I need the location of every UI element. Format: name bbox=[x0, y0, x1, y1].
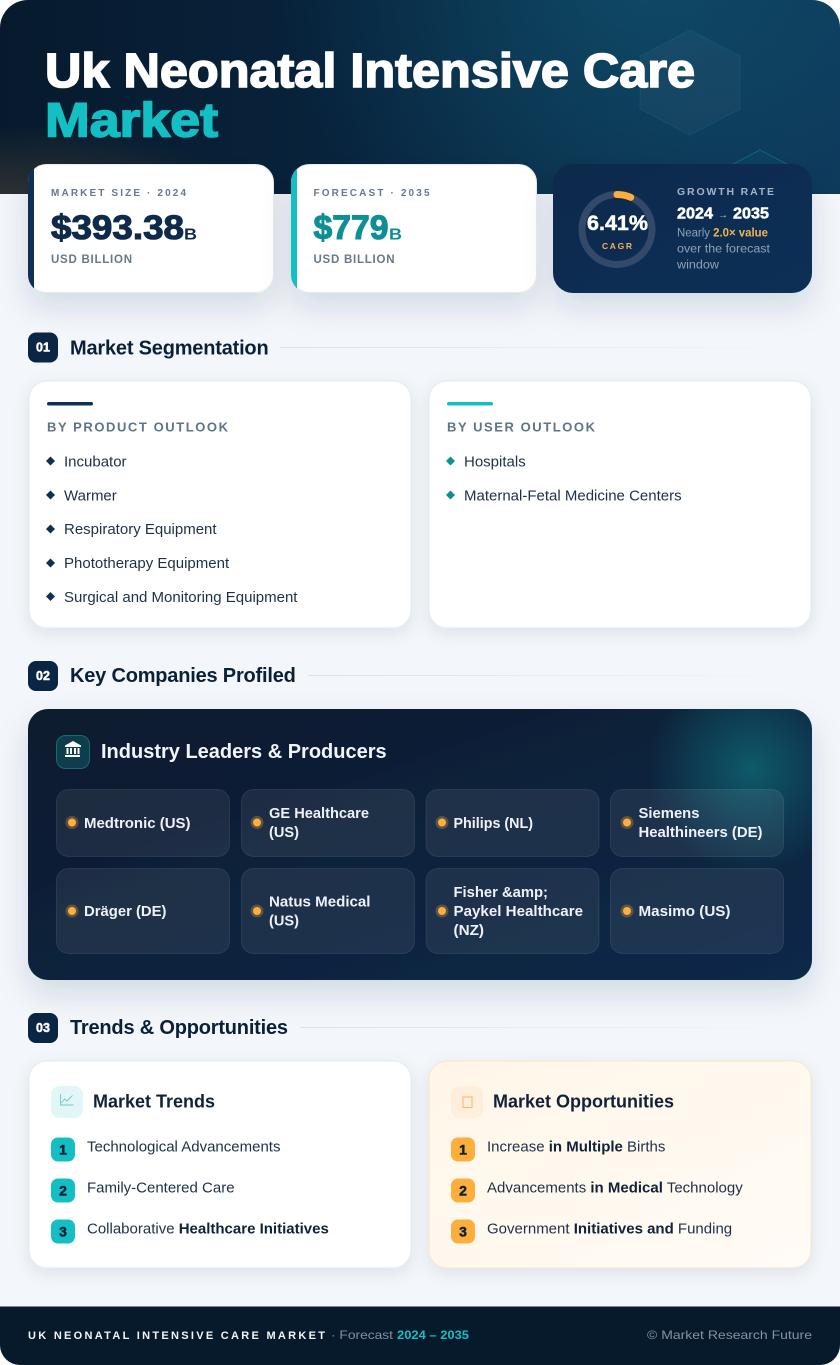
footer: · Forecast bbox=[331, 1328, 394, 1342]
company: Siemens Healthineers: Siemens bbox=[638, 806, 700, 822]
company: Fisher and Paykel Healthcare bbox=[426, 868, 599, 954]
stat card: growth rate: 2024 bbox=[677, 206, 713, 222]
stat card: forecast 2035: USD BILLION bbox=[314, 254, 394, 266]
header banner bbox=[0, 0, 840, 194]
section heading 01: 01 bbox=[36, 340, 50, 354]
company: GE Healthcare: (US) bbox=[269, 825, 299, 841]
panel: market trends: 2 bbox=[59, 1182, 67, 1198]
title: Market bbox=[45, 94, 218, 148]
panel: market opportunities: 2 bbox=[459, 1182, 467, 1198]
panel: by product outlook: Surgical and Monitoring Equipment bbox=[64, 589, 298, 606]
company: Medtronic bbox=[56, 790, 230, 856]
icon: placeholder glyph bbox=[451, 1086, 483, 1118]
company: Medtronic: Medtronic (US) bbox=[84, 816, 191, 832]
title bbox=[45, 45, 695, 148]
panel: market trends: Market Trends bbox=[93, 1092, 215, 1112]
stat card: market size 2024 bbox=[28, 164, 274, 293]
company: Fisher and Paykel Healthcare: (NZ) bbox=[454, 923, 484, 939]
panel: by product outlook: Incubator bbox=[64, 454, 127, 470]
company: Drager bbox=[56, 868, 230, 954]
panel: by product outlook: Respiratory Equipment bbox=[64, 521, 217, 538]
section heading 03: 03 bbox=[36, 1021, 50, 1035]
stat card: growth rate: 2035 bbox=[733, 206, 769, 222]
panel: by product outlook: BY PRODUCT OUTLOOK bbox=[47, 420, 229, 434]
company: Drager: Dräger (DE) bbox=[84, 904, 167, 920]
stat card: forecast 2035: B bbox=[389, 226, 402, 244]
panel: market opportunities bbox=[429, 1061, 811, 1268]
company: Siemens Healthineers bbox=[610, 790, 784, 856]
footer: 2024 – 2035 bbox=[397, 1328, 469, 1342]
panel: market trends: Family-Centered Care bbox=[87, 1180, 235, 1196]
title: Uk Neonatal Intensive Care bbox=[45, 45, 695, 98]
panel: market opportunities: 1 bbox=[459, 1142, 467, 1158]
company: Natus Medical: Natus Medical bbox=[269, 894, 370, 910]
stat card: market size 2024: $393.38 bbox=[51, 209, 184, 247]
section heading 01 bbox=[28, 332, 812, 362]
company: GE Healthcare: GE Healthcare bbox=[269, 806, 369, 822]
section heading 02: Key Companies Profiled bbox=[70, 665, 296, 687]
panel: industry leaders and producers: Industry Leaders & Producers bbox=[101, 741, 387, 763]
icon: bank building bbox=[56, 736, 90, 768]
panel: market opportunities: 3 bbox=[459, 1224, 467, 1240]
stat card: forecast 2035 bbox=[291, 164, 536, 293]
footer: © Market Research Future bbox=[647, 1328, 812, 1342]
company: Fisher and Paykel Healthcare: Fisher &amp; bbox=[454, 885, 548, 901]
panel: market opportunities: Increase in Multiple Births bbox=[487, 1138, 665, 1156]
company: Siemens Healthineers: Healthineers (DE) bbox=[638, 825, 763, 841]
CAGR ring chart bbox=[582, 194, 652, 264]
company: GE Healthcare bbox=[242, 790, 414, 856]
panel: by user outlook: Maternal-Fetal Medicine Centers bbox=[464, 488, 682, 504]
panel: market trends bbox=[29, 1061, 411, 1268]
stat card: growth rate bbox=[553, 164, 812, 293]
panel: by product outlook: Warmer bbox=[64, 488, 117, 504]
stat card: growth rate: → bbox=[718, 210, 728, 221]
stat card: growth rate: Nearly 2.0× value bbox=[677, 228, 768, 240]
stat card: forecast 2035: FORECAST · 2035 bbox=[314, 188, 430, 199]
panel: market trends: Collaborative Healthcare Initiatives bbox=[87, 1220, 329, 1238]
stat card: growth rate: window bbox=[676, 260, 720, 272]
footer: UK NEONATAL INTENSIVE CARE MARKET bbox=[28, 1330, 325, 1342]
company: Masimo bbox=[610, 868, 784, 954]
panel: by user outlook: Hospitals bbox=[464, 454, 526, 470]
panel: market opportunities: Government Initiatives and Funding bbox=[487, 1220, 732, 1238]
stat card: growth rate: over the forecast bbox=[677, 244, 771, 256]
section heading 03 bbox=[28, 1013, 812, 1043]
panel: market opportunities: Market Opportunities bbox=[493, 1092, 674, 1112]
stat card: growth rate: GROWTH RATE bbox=[677, 186, 774, 198]
CAGR ring chart: 6.41% bbox=[587, 211, 648, 235]
section heading 01: Market Segmentation bbox=[70, 338, 268, 360]
company: Philips bbox=[426, 790, 599, 856]
section heading 02: 02 bbox=[36, 669, 50, 683]
stat card: market size 2024: B bbox=[184, 226, 197, 244]
company: Natus Medical: (US) bbox=[269, 914, 299, 930]
section heading 03: Trends & Opportunities bbox=[70, 1017, 288, 1039]
icon: line chart bbox=[51, 1086, 83, 1118]
company: Natus Medical bbox=[242, 868, 414, 954]
stat card: market size 2024: USD BILLION bbox=[51, 254, 132, 266]
company: Masimo: Masimo (US) bbox=[638, 904, 731, 920]
company: Fisher and Paykel Healthcare: Paykel Healthcare bbox=[454, 904, 583, 920]
company: Philips: Philips (NL) bbox=[454, 816, 533, 832]
section heading 02 bbox=[28, 661, 812, 691]
stat card: forecast 2035: $779 bbox=[314, 209, 388, 247]
panel: by product outlook: Phototherapy Equipment bbox=[64, 555, 230, 572]
panel: industry leaders and producers bbox=[28, 709, 812, 980]
panel: market trends: 3 bbox=[59, 1224, 67, 1240]
stat card: market size 2024: MARKET SIZE · 2024 bbox=[51, 188, 186, 199]
panel: market opportunities: Advancements in Medical Technology bbox=[487, 1180, 743, 1196]
panel: market trends: Technological Advancements bbox=[87, 1138, 280, 1156]
panel: by user outlook bbox=[429, 381, 811, 628]
panel: by product outlook bbox=[29, 381, 411, 628]
panel: market trends: 1 bbox=[59, 1142, 67, 1158]
CAGR ring chart: CAGR bbox=[602, 241, 632, 251]
footer bbox=[0, 1306, 840, 1365]
panel: by user outlook: BY USER OUTLOOK bbox=[447, 420, 596, 434]
